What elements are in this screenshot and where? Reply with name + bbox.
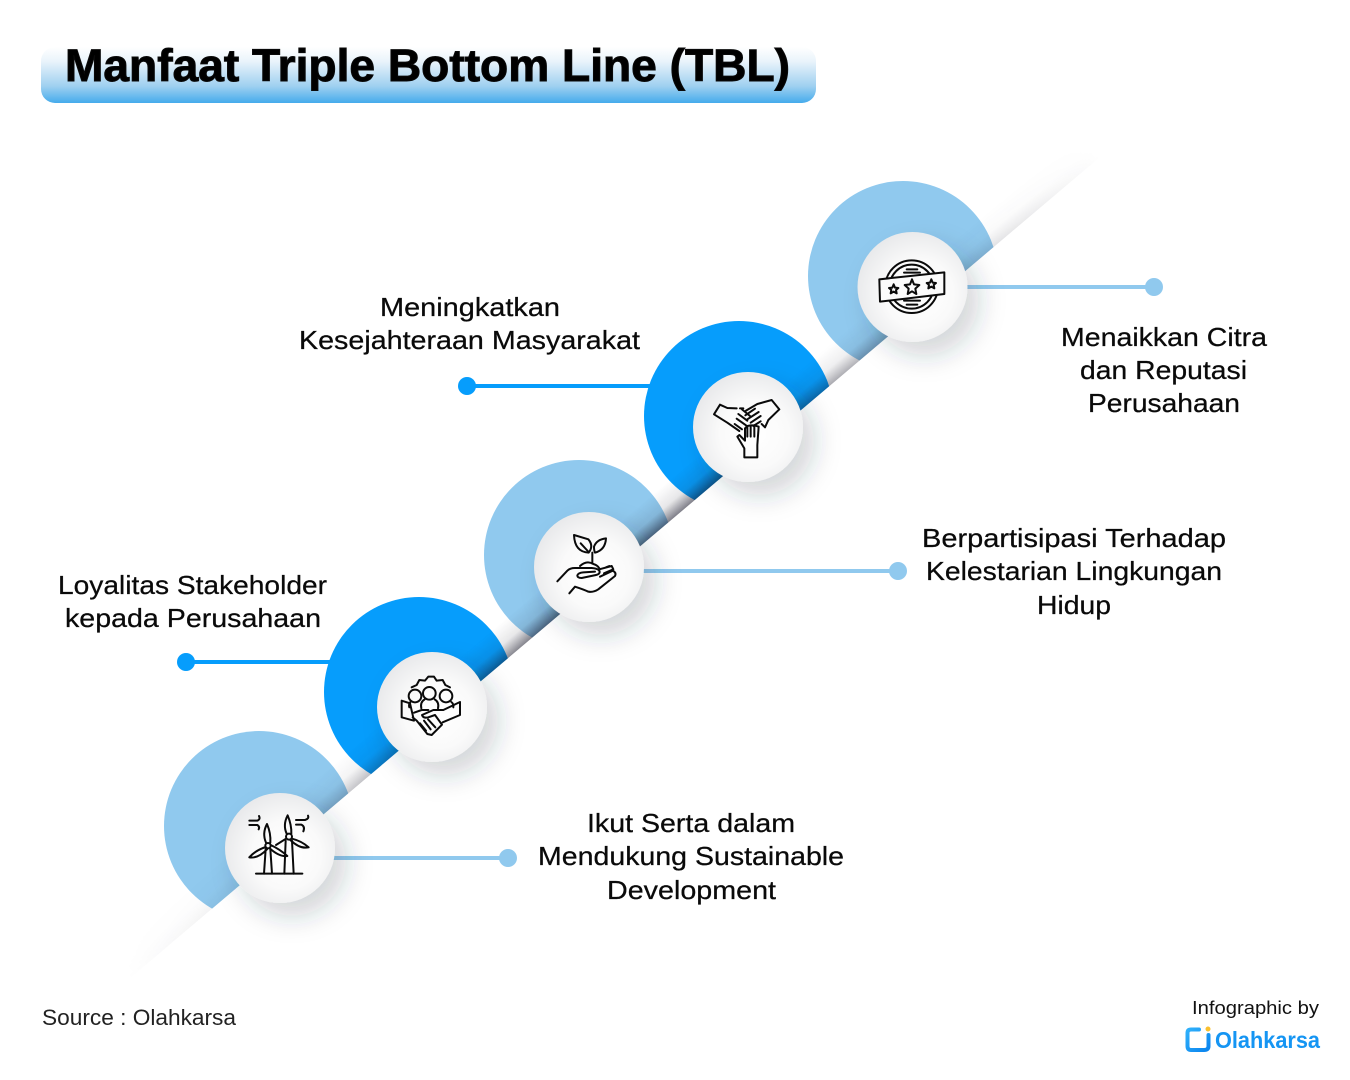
label: stakeholder loyalty: kepada Perusahaan <box>65 603 321 633</box>
icon: wind turbines <box>249 815 309 874</box>
label: reputation: Perusahaan <box>1088 388 1240 418</box>
label: community welfare <box>299 292 641 355</box>
label: reputation: dan Reputasi <box>1080 355 1247 385</box>
label: reputation: Menaikkan Citra <box>1061 322 1268 352</box>
label: environment <box>922 523 1226 620</box>
source: Source : Olahkarsa <box>42 1005 237 1030</box>
connector: stakeholder loyalty <box>177 653 332 671</box>
icon: seedling in hand <box>557 535 615 593</box>
credit: infographic by olahkarsa <box>1188 998 1320 1053</box>
icon disc: wind turbines <box>225 793 335 903</box>
connector: reputation <box>965 278 1163 296</box>
label: community welfare: Meningkatkan <box>380 292 560 322</box>
label: sustainable development: Ikut Serta dalam <box>587 808 795 838</box>
credit: infographic by olahkarsa: Infographic by <box>1192 998 1319 1018</box>
label: sustainable development: Development <box>607 875 777 905</box>
icon disc: plant in hand <box>534 512 644 622</box>
connector: environment <box>640 562 907 580</box>
label: environment: Hidup <box>1037 590 1111 620</box>
credit: infographic by olahkarsa: Olahkarsa <box>1215 1027 1320 1053</box>
label: sustainable development <box>538 808 844 905</box>
label: sustainable development: Mendukung Sustainable <box>538 841 844 871</box>
label: stakeholder loyalty <box>58 570 327 633</box>
icon: olahkarsa logo <box>1188 1026 1210 1050</box>
label: environment: Berpartisipasi Terhadap <box>922 523 1226 553</box>
icon: handshake with people and gear <box>402 677 460 735</box>
icon disc: handshake and team <box>377 652 487 762</box>
icon disc: reputation badge <box>858 232 968 342</box>
icon disc: joined hands <box>693 372 803 482</box>
icon: star rating badge <box>879 260 944 313</box>
icon: three joined hands <box>714 400 779 457</box>
label: community welfare: Kesejahteraan Masyarakat <box>299 325 641 355</box>
label: reputation <box>1061 322 1268 418</box>
label: environment: Kelestarian Lingkungan <box>926 556 1222 586</box>
title: Manfaat Triple Bottom Line (TBL) <box>65 40 790 91</box>
diagonal staircase with semicircles <box>164 181 1066 926</box>
connector: community welfare <box>458 377 651 395</box>
connector: sustainable development <box>330 849 517 867</box>
label: stakeholder loyalty: Loyalitas Stakeholder <box>58 570 327 600</box>
